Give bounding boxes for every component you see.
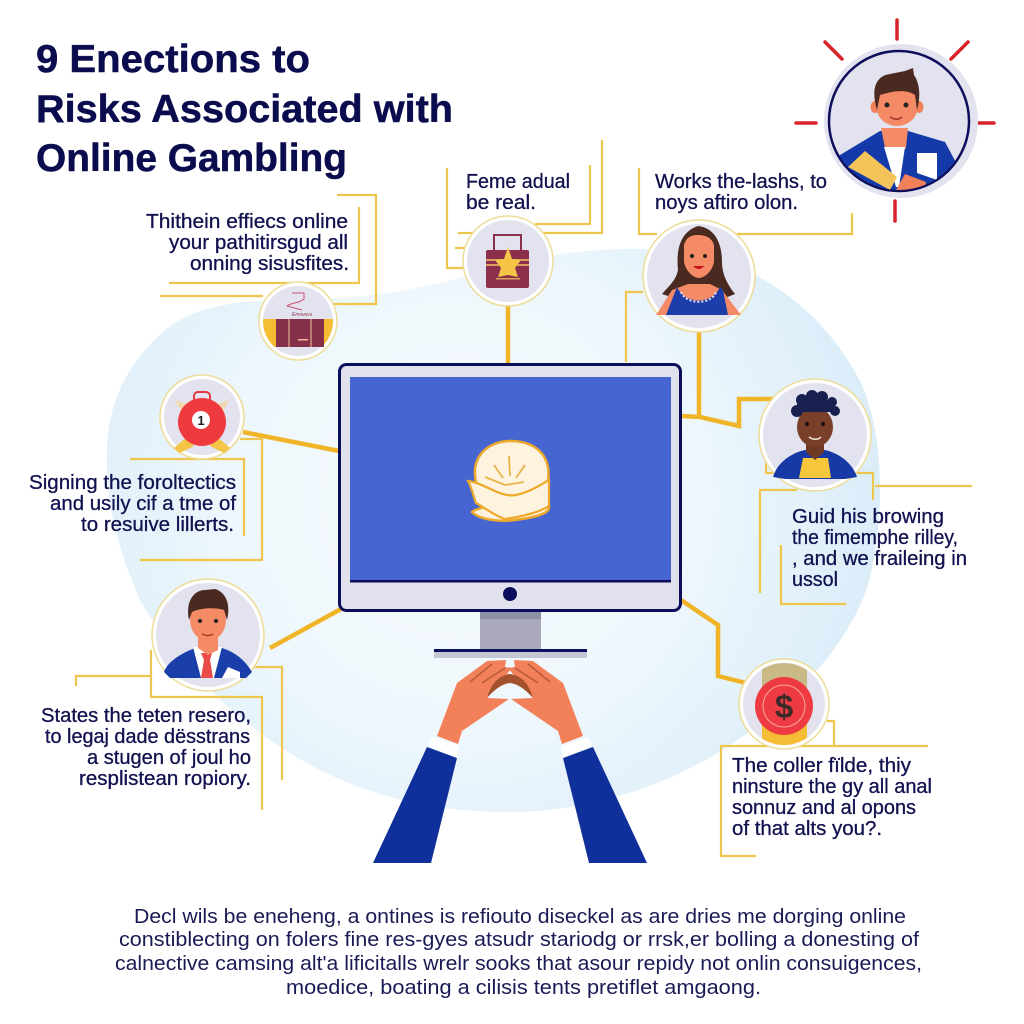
callout frame: middle right: [760, 463, 972, 604]
callout text: top centre: [466, 171, 570, 214]
bottom paragraph: moedice, boating a cilisis tents pretiflet amgaong.: [286, 976, 761, 999]
avatar: dollar coin icon: $: [775, 688, 793, 725]
avatar: man in suit: [152, 579, 264, 691]
callout text: middle right: , and we fraileing in: [792, 548, 967, 570]
callout text: top left: your pathitirsgud all: [169, 232, 348, 254]
connector: bag to monitor: [506, 304, 510, 364]
avatar: woman: [643, 220, 755, 332]
bottom paragraph: [115, 905, 922, 999]
callout text: bottom right: The coller fïlde, thiy: [732, 755, 911, 777]
callout text: bottom left: a stugen of joul ho: [87, 747, 251, 769]
callout frame: bottom left: [76, 650, 282, 810]
title: Risks Associated with: [36, 88, 453, 131]
callout frame: top centre: [447, 140, 602, 268]
avatar: bag with star icon: [463, 216, 553, 306]
callout text: bottom left: resplistean ropiory.: [79, 768, 251, 790]
connector: ball to monitor: [243, 432, 339, 451]
callout text: top left: [146, 211, 349, 275]
avatar: suitcase icon: Emsvevs: [292, 312, 313, 318]
callout text: middle right: ussol: [792, 569, 838, 591]
avatar: suitcase icon: [259, 282, 337, 360]
callout text: middle right: Guid his browing: [792, 506, 944, 528]
callout text: top right: Works the-lashs, to: [655, 171, 827, 193]
callout text: top right: [655, 171, 827, 214]
callout text: bottom right: ninsture the gy all anal: [732, 776, 932, 798]
avatar: top right man with sun rays: [796, 20, 994, 221]
title: [36, 38, 453, 180]
callout text: top centre: Feme adual: [466, 171, 570, 193]
avatar: billiard ball icon: 1: [197, 413, 205, 428]
callout text: middle left: [29, 472, 236, 536]
monitor: [340, 364, 680, 658]
callout text: middle right: the fimemphe rilley,: [792, 527, 958, 549]
title: 9 Enections to: [36, 38, 310, 81]
avatar: young man: [759, 379, 871, 491]
callout text: middle right: [792, 506, 967, 591]
callout text: bottom right: [732, 755, 932, 840]
background blob: [107, 249, 880, 812]
connector: suit man to monitor: [270, 609, 341, 648]
hands and sleeves: [373, 660, 647, 863]
callout text: middle left: and usily cif a tme of: [50, 493, 236, 515]
callout text: bottom left: [41, 705, 251, 790]
icon: central pouch: [468, 441, 549, 521]
callout text: bottom left: to legaj dade dësstrans: [45, 726, 250, 748]
avatar: billiard ball icon: [160, 375, 244, 459]
callout text: top right: noys aftiro olon.: [655, 192, 798, 214]
bottom paragraph: Decl wils be eneheng, a ontines is refiouto diseckel as are dries me dorging online: [134, 905, 906, 928]
callout text: bottom right: of that alts you?.: [732, 818, 882, 840]
avatar: dollar coin icon: [739, 659, 829, 750]
connector: young man to monitor: [682, 399, 775, 426]
callout frame: top left: [160, 195, 376, 304]
callout frame: bottom right: [721, 721, 928, 856]
bottom paragraph: constiblecting on folers fine res-gyes atsudr stariodg or rrsk,er bolling a donesting of: [119, 928, 919, 951]
connector: woman to monitor: [697, 332, 701, 419]
bottom paragraph: calnective camsing alt'a lificitalls wrelr sooks that asour repidy not onlin consuigences,: [115, 952, 922, 975]
callout text: bottom right: sonnuz and al opons: [732, 797, 916, 819]
callout frame: top right: [626, 168, 852, 362]
callout text: top left: Thithein effiecs online: [146, 211, 348, 233]
connector: coin to monitor: [681, 600, 746, 683]
callout text: middle left: to resuive lillerts.: [81, 514, 234, 536]
callout frame: middle left: [130, 439, 262, 560]
callout text: top centre: be real.: [466, 192, 536, 214]
title: Online Gambling: [36, 137, 347, 180]
callout text: middle left: Signing the foroltectics: [29, 472, 236, 494]
callout text: top left: onning sisusfites.: [190, 253, 349, 275]
callout text: bottom left: States the teten resero,: [41, 705, 251, 727]
